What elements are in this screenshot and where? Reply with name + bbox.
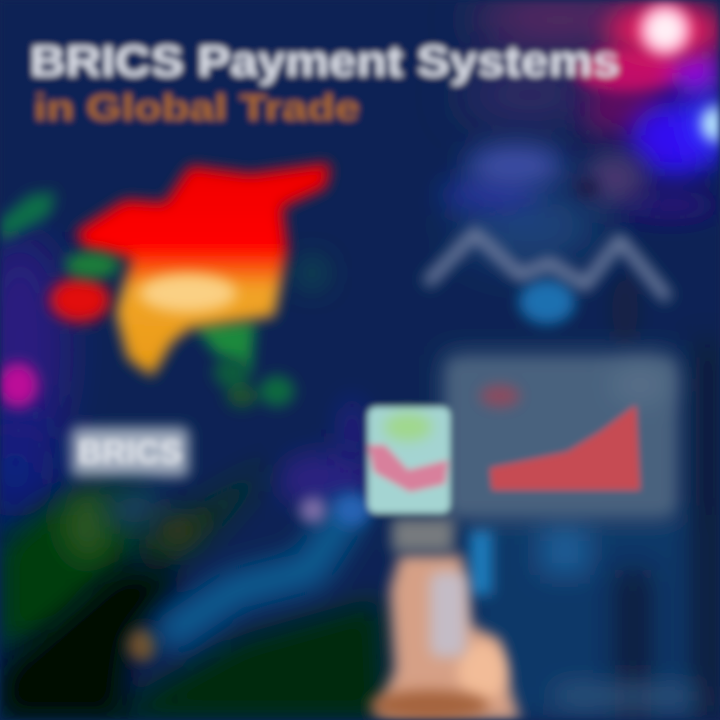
purple spot xyxy=(300,497,326,523)
blue behind phone xyxy=(334,494,370,526)
map: green western region xyxy=(65,252,119,278)
dark green terrain xyxy=(0,462,385,720)
green fragment xyxy=(0,192,55,242)
map: pale yellow centre xyxy=(140,274,236,312)
line chart: dark under peak xyxy=(608,275,642,345)
map: main landmass xyxy=(76,163,330,376)
finger highlight xyxy=(458,642,506,702)
line chart xyxy=(430,233,665,345)
hand holding phone xyxy=(334,407,520,720)
title: BRICS Payment Systems xyxy=(30,38,620,86)
map: faint green region xyxy=(297,257,327,289)
palm shadow xyxy=(370,690,490,720)
map: green islands xyxy=(214,356,294,408)
map: red western region xyxy=(50,278,110,322)
background glows xyxy=(0,0,720,520)
screen: red element xyxy=(368,445,448,492)
line chart: blue highlight xyxy=(519,280,575,324)
white label box xyxy=(72,428,188,476)
line chart: zigzag line xyxy=(430,233,665,295)
screen: green element xyxy=(384,413,432,441)
subtitle: in Global Trade xyxy=(34,87,360,128)
map of Eurasia xyxy=(50,163,330,408)
glow: blue light xyxy=(686,90,720,158)
chart panel xyxy=(444,354,678,519)
glow: pink light xyxy=(605,0,720,60)
panel: red area chart xyxy=(490,405,640,490)
magenta fragment xyxy=(0,363,38,407)
hand xyxy=(375,555,520,720)
phone side highlight xyxy=(430,572,466,657)
blue river streak xyxy=(175,515,345,630)
phone screen xyxy=(368,407,450,513)
lower skyline xyxy=(470,340,720,720)
phone dark base xyxy=(392,518,454,552)
white label box: BRICS xyxy=(78,434,182,470)
panel: small red mark xyxy=(480,385,520,407)
map: south-east green band xyxy=(195,322,255,372)
